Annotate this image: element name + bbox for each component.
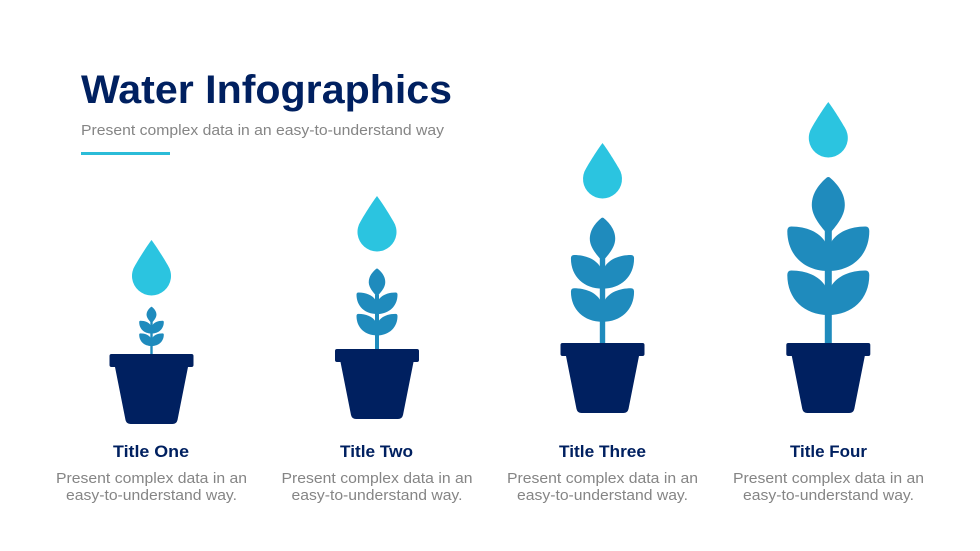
- text: description one: [56, 470, 247, 504]
- panel: title two: [282, 196, 472, 504]
- icon: pot three: [560, 343, 644, 413]
- text: description three: easy-to-understand way.: [517, 487, 688, 504]
- icon: pot one: [110, 354, 194, 424]
- text: description four: Present complex data in an: [733, 470, 924, 487]
- icon: plant two: [356, 268, 398, 349]
- icon: plant three: [571, 218, 634, 343]
- panel: title one: [56, 240, 247, 504]
- icon: plant four: [787, 177, 869, 343]
- icon: pot two: [335, 349, 419, 419]
- text: description two: Present complex data in an: [282, 470, 472, 487]
- text: description one: Present complex data in an: [56, 470, 247, 487]
- accent rule: [81, 152, 170, 155]
- icon: water drop two: [358, 196, 396, 251]
- icon: water drop three: [583, 143, 622, 198]
- icon: water drop one: [132, 240, 171, 295]
- text: description two: easy-to-understand way.: [292, 487, 462, 504]
- heading: title two: Title Two: [340, 442, 413, 461]
- text: description four: easy-to-understand way.: [743, 487, 914, 504]
- text: description three: Present complex data in an: [507, 470, 698, 487]
- heading: title one: Title One: [113, 442, 189, 461]
- text: description two: [282, 470, 472, 504]
- icon: plant one: [139, 307, 164, 354]
- panel: title four: [733, 102, 924, 504]
- text: description four: [733, 470, 924, 504]
- text: description three: [507, 470, 698, 504]
- icon: water drop four: [809, 102, 848, 157]
- title: Water Infographics: [81, 68, 452, 112]
- icon: pot four: [786, 343, 870, 413]
- panel: title three: [507, 143, 698, 504]
- text: description one: easy-to-understand way.: [66, 487, 237, 504]
- heading: title three: Title Three: [559, 442, 646, 461]
- heading: title four: Title Four: [790, 442, 867, 461]
- subtitle: Present complex data in an easy-to-understand way: [81, 122, 445, 139]
